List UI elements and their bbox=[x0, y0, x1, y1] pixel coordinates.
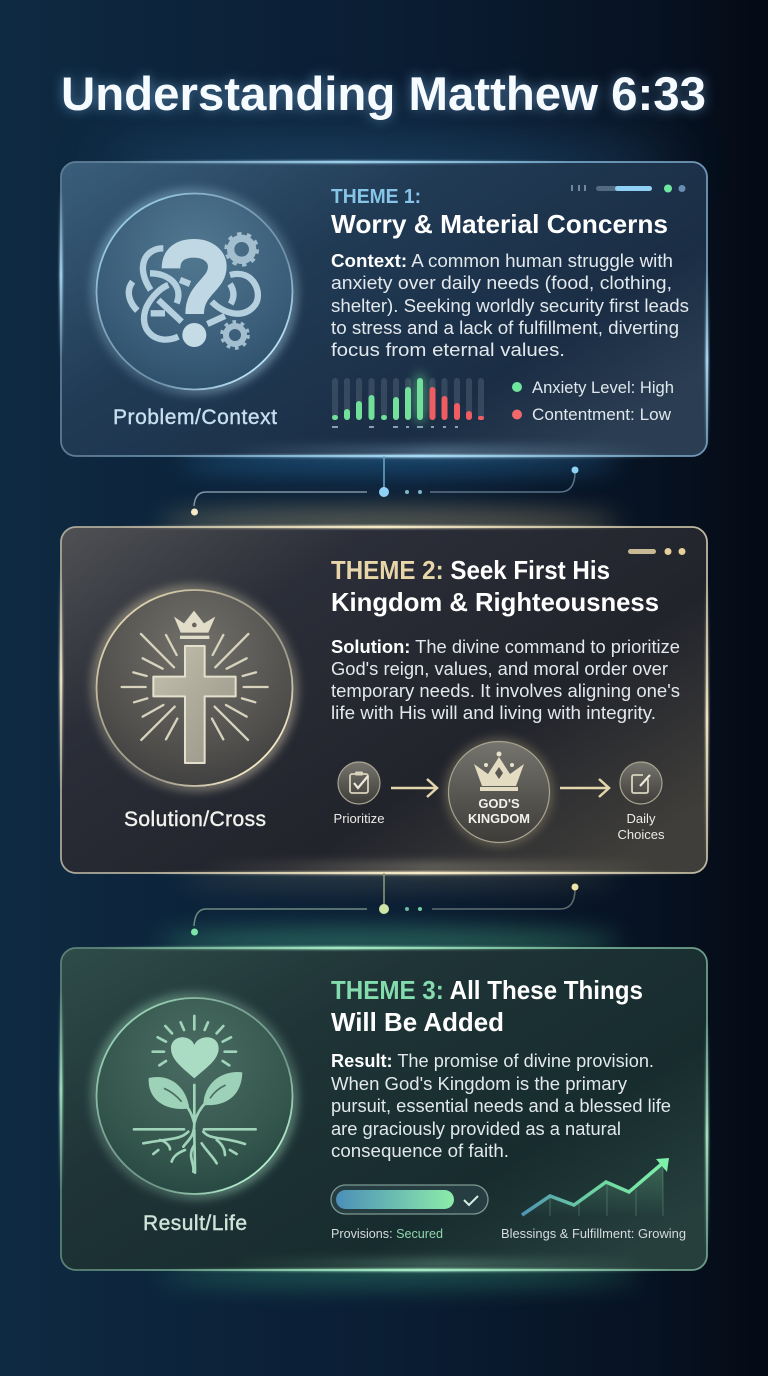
text: context bbox=[331, 251, 689, 360]
icon: heart plant in glass circle bbox=[96, 998, 292, 1194]
connector: theme 2 to theme 3 bbox=[191, 873, 578, 936]
text: result: consequence of faith. bbox=[331, 1141, 509, 1161]
bar chart: anxiety and contentment bbox=[332, 372, 484, 427]
step: god's kingdom: KINGDOM bbox=[468, 811, 530, 826]
heading: theme 2 bbox=[331, 555, 659, 617]
text: solution: life with His will and living with integrity. bbox=[331, 703, 656, 723]
heading: theme 3 bbox=[331, 975, 643, 1037]
text: result bbox=[331, 1051, 671, 1161]
legend: Contentment: Low bbox=[532, 406, 671, 424]
label: problem/context: Problem/Context bbox=[113, 406, 277, 429]
text: context: to stress and a lack of fulfillment, diverting bbox=[331, 318, 679, 338]
progress bar: provisions secured: Provisions: Secured bbox=[331, 1226, 443, 1241]
label: solution/cross: Solution/Cross bbox=[124, 808, 266, 831]
connector: theme 1 to theme 2 bbox=[191, 456, 578, 516]
panel: theme 3 bbox=[60, 946, 708, 1272]
progress bar: provisions secured bbox=[331, 1185, 488, 1241]
line chart: blessings growing bbox=[501, 1158, 686, 1241]
icon: question mark and knots in glass circle bbox=[96, 194, 292, 390]
heading: theme 2: THEME 2: Seek First His bbox=[331, 555, 610, 585]
panel: theme 2 bbox=[60, 526, 708, 874]
text: result: are graciously provided as a natural bbox=[331, 1119, 621, 1139]
step: god's kingdom: GOD'S bbox=[478, 796, 520, 811]
step: god's kingdom bbox=[445, 738, 553, 846]
panel: theme 1 bbox=[60, 160, 708, 458]
text: solution: God's reign, values, and moral order over bbox=[331, 659, 668, 679]
flow diagram: prioritize to kingdom to daily choices bbox=[334, 738, 665, 846]
heading: theme 3: THEME 3: All These Things bbox=[331, 975, 643, 1005]
heading: theme 1: THEME 1: bbox=[331, 186, 421, 208]
heading: theme 1 bbox=[331, 186, 668, 239]
status indicators bbox=[628, 548, 686, 555]
line chart: blessings growing: Blessings & Fulfillment: Growing bbox=[501, 1226, 686, 1241]
text: solution: Solution: The divine command to prioritize bbox=[331, 637, 680, 657]
text: solution: temporary needs. It involves aligning one's bbox=[331, 681, 680, 701]
status indicators bbox=[572, 184, 686, 192]
text: result: When God's Kingdom is the primary bbox=[331, 1074, 627, 1094]
step: prioritize: Prioritize bbox=[334, 811, 384, 826]
step: daily choices bbox=[618, 762, 665, 842]
step: prioritize bbox=[334, 762, 384, 826]
text: context: focus from eternal values. bbox=[331, 340, 565, 360]
text: context: anxiety over daily needs (food, clothing, bbox=[331, 273, 672, 293]
arrow bbox=[391, 779, 437, 797]
text: context: Context: A common human struggle with bbox=[331, 251, 673, 271]
legend: Anxiety Level: High bbox=[532, 379, 674, 397]
text: result: pursuit, essential needs and a blessed life bbox=[331, 1096, 671, 1116]
legend bbox=[512, 379, 674, 424]
heading: theme 3: Will Be Added bbox=[331, 1007, 504, 1037]
label: result/life: Result/Life bbox=[143, 1212, 247, 1235]
step: daily choices: Daily bbox=[627, 811, 656, 826]
text: result: Result: The promise of divine provision. bbox=[331, 1051, 654, 1071]
arrow bbox=[560, 779, 609, 797]
heading: theme 2: Kingdom & Righteousness bbox=[331, 587, 659, 617]
text: solution bbox=[331, 637, 680, 723]
step: daily choices: Choices bbox=[618, 827, 665, 842]
heading: theme 1: Worry & Material Concerns bbox=[331, 209, 668, 239]
title: Understanding Matthew 6:33 bbox=[61, 67, 706, 120]
text: context: shelter). Seeking worldly security first leads bbox=[331, 296, 689, 316]
icon: crowned cross in glass circle bbox=[96, 590, 292, 786]
